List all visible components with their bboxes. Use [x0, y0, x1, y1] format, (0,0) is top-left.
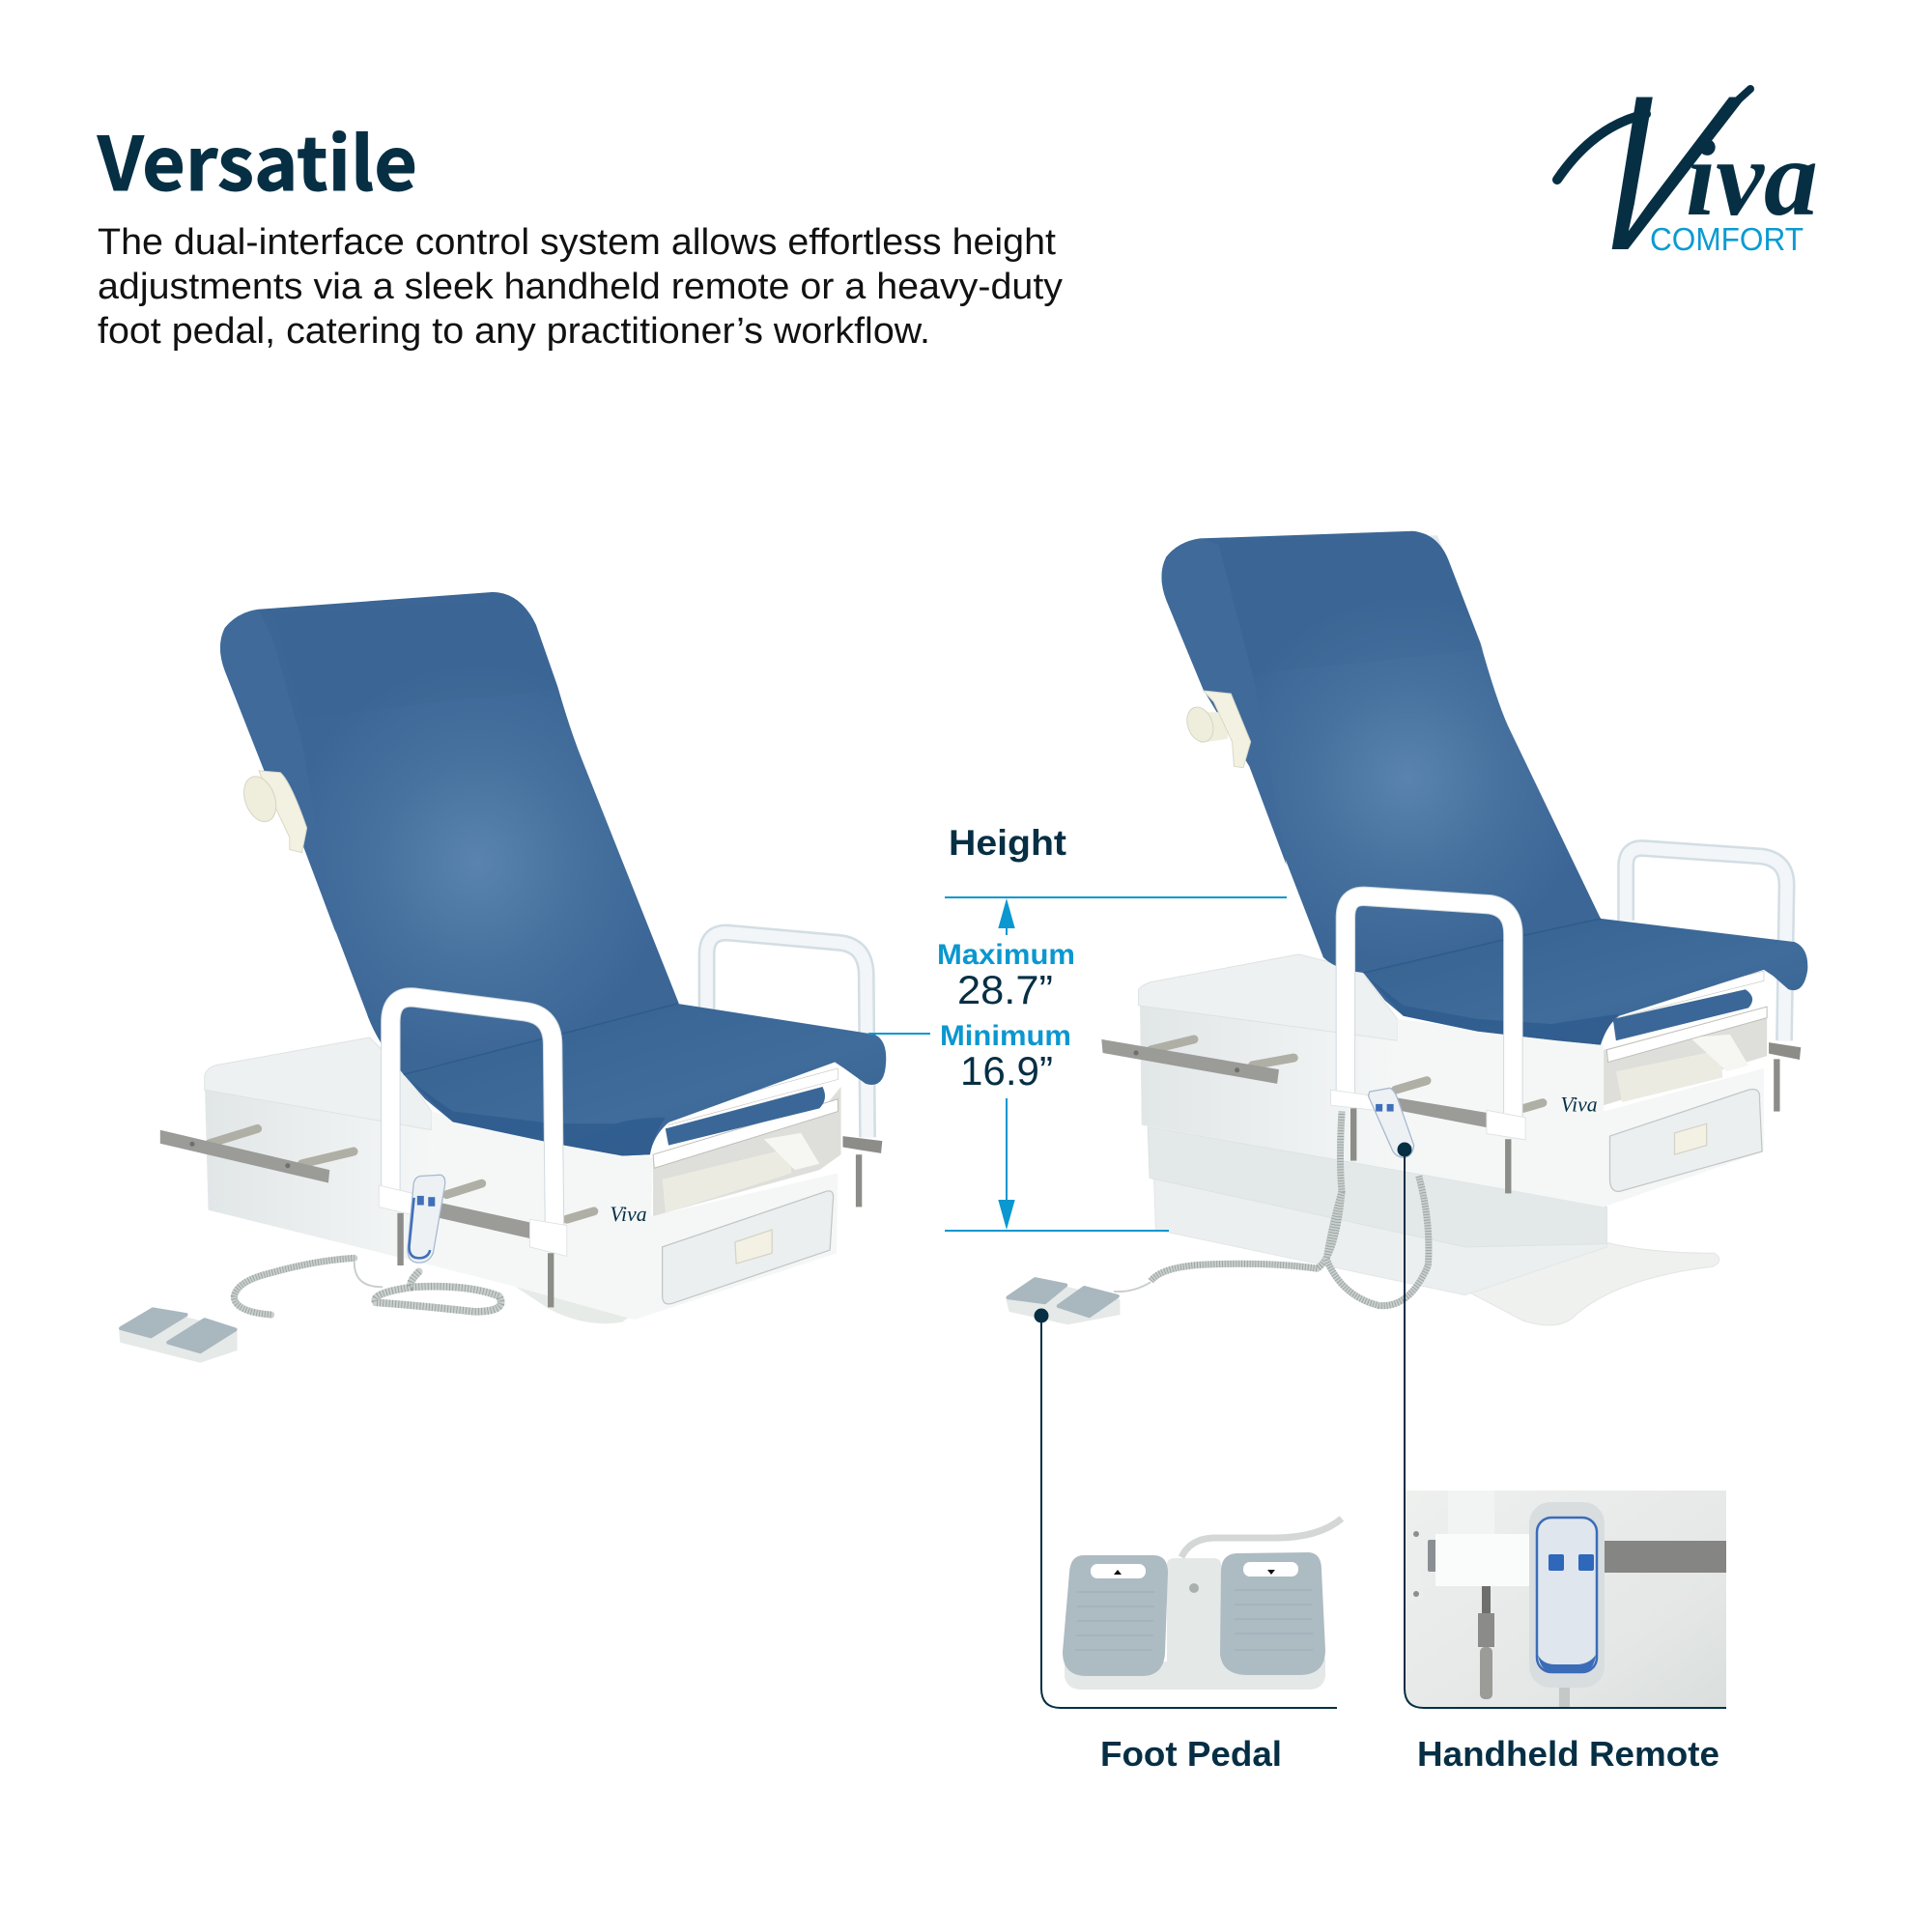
seat	[404, 1004, 886, 1155]
bracket neck	[1448, 1491, 1494, 1535]
clamp pins	[1350, 1042, 1801, 1193]
cream knob	[238, 771, 307, 853]
middle column layer	[1148, 1127, 1606, 1247]
front body	[431, 1112, 838, 1320]
backrest side strip	[220, 610, 336, 933]
small Viva logo: Viva	[1560, 1094, 1598, 1117]
headrest shading	[274, 600, 557, 717]
inset background	[1405, 1491, 1726, 1708]
drawer handle	[735, 1230, 772, 1264]
drawer handle	[1674, 1123, 1707, 1154]
seat rear seam	[404, 1004, 678, 1074]
remote	[1529, 1502, 1605, 1688]
rail brackets	[379, 1185, 567, 1256]
foot pedal leader line	[1034, 1308, 1337, 1708]
drawer	[1610, 1090, 1762, 1191]
description text: The dual-interface control system allows effortless height	[98, 222, 1056, 263]
base body left face	[205, 1077, 435, 1266]
coiled cables	[234, 1258, 501, 1315]
description text	[98, 222, 1063, 352]
seat side shade	[410, 1081, 666, 1155]
handheld remote inset	[1397, 1142, 1726, 1708]
remote leader line	[1405, 1150, 1726, 1708]
top tray	[205, 1037, 431, 1130]
near handrail	[1346, 896, 1513, 1123]
foot pedal inset	[1063, 1519, 1342, 1690]
mechanism under seat	[653, 1068, 841, 1216]
handheld remote label: Handheld Remote	[1417, 1734, 1719, 1774]
pedal base	[1065, 1558, 1325, 1690]
height dimension	[868, 822, 1287, 1231]
seat side shade	[1370, 979, 1619, 1045]
front bar	[431, 1183, 594, 1238]
floor base	[1465, 1240, 1719, 1325]
logo: Viva Comfort: COMFORT	[1650, 221, 1804, 257]
backrest	[220, 592, 679, 1074]
chair: low position	[119, 592, 886, 1363]
plate slot	[1428, 1540, 1437, 1572]
handheld remote	[1368, 1088, 1414, 1157]
top tray	[1139, 954, 1397, 1040]
minimum guide line	[945, 1230, 1169, 1232]
logo: Viva Comfort: iva	[1686, 119, 1818, 239]
far handrail	[1626, 848, 1787, 1040]
seat rear seam	[1363, 919, 1601, 973]
foot pedal label: Foot Pedal	[1100, 1734, 1282, 1774]
pedal cable	[1181, 1519, 1342, 1557]
arrow down	[998, 1098, 1015, 1230]
height heading: Height	[949, 822, 1067, 863]
chair: high position	[1006, 531, 1807, 1325]
headrest shading	[1218, 535, 1484, 674]
backrest	[1162, 531, 1601, 973]
foot pedal	[119, 1309, 238, 1363]
metal pin	[1478, 1586, 1494, 1699]
arrow up	[998, 898, 1015, 935]
logo: Viva Comfort: V	[1543, 48, 1769, 297]
coiled cables	[1114, 1112, 1429, 1306]
title: Versatile	[97, 105, 417, 212]
backrest side strip	[1162, 538, 1287, 865]
side bar	[1101, 1039, 1293, 1084]
seat level line	[868, 1033, 930, 1035]
base body left face	[1140, 991, 1397, 1170]
right pad	[1220, 1552, 1325, 1675]
minimum value: 16.9”	[960, 1048, 1053, 1094]
maximum guide line	[945, 896, 1287, 898]
remote cable	[1559, 1688, 1570, 1708]
description text: foot pedal, catering to any practitioner’s workflow.	[98, 311, 930, 352]
pedal screw	[1189, 1583, 1199, 1593]
handheld remote	[408, 1175, 445, 1263]
description text: adjustments via a sleek handheld remote or a heavy-duty	[98, 267, 1063, 307]
floor base	[511, 1284, 640, 1323]
left pad	[1063, 1555, 1168, 1676]
foot pedal	[1006, 1279, 1120, 1324]
metal bar	[1605, 1541, 1726, 1573]
maximum label: Maximum	[937, 939, 1075, 971]
cream knob	[1182, 691, 1251, 768]
front bar	[1396, 1081, 1543, 1127]
side bar	[160, 1128, 354, 1183]
lower column layer	[1154, 1178, 1606, 1295]
leader dot	[1397, 1142, 1412, 1157]
clamp pins	[397, 1136, 882, 1307]
maximum value: 28.7”	[957, 967, 1053, 1012]
plate screws	[1413, 1531, 1419, 1597]
front body	[1397, 1019, 1764, 1207]
far handrail	[707, 933, 867, 1137]
rail brackets	[1331, 1090, 1525, 1140]
minimum label: Minimum	[940, 1020, 1071, 1052]
drawer	[663, 1191, 834, 1304]
small Viva logo: Viva	[610, 1203, 647, 1226]
mounting plate	[1407, 1528, 1423, 1601]
white bracket	[1435, 1534, 1529, 1586]
near handrail	[390, 997, 554, 1232]
mechanism under seat	[1604, 971, 1767, 1105]
seat	[1363, 919, 1807, 1045]
